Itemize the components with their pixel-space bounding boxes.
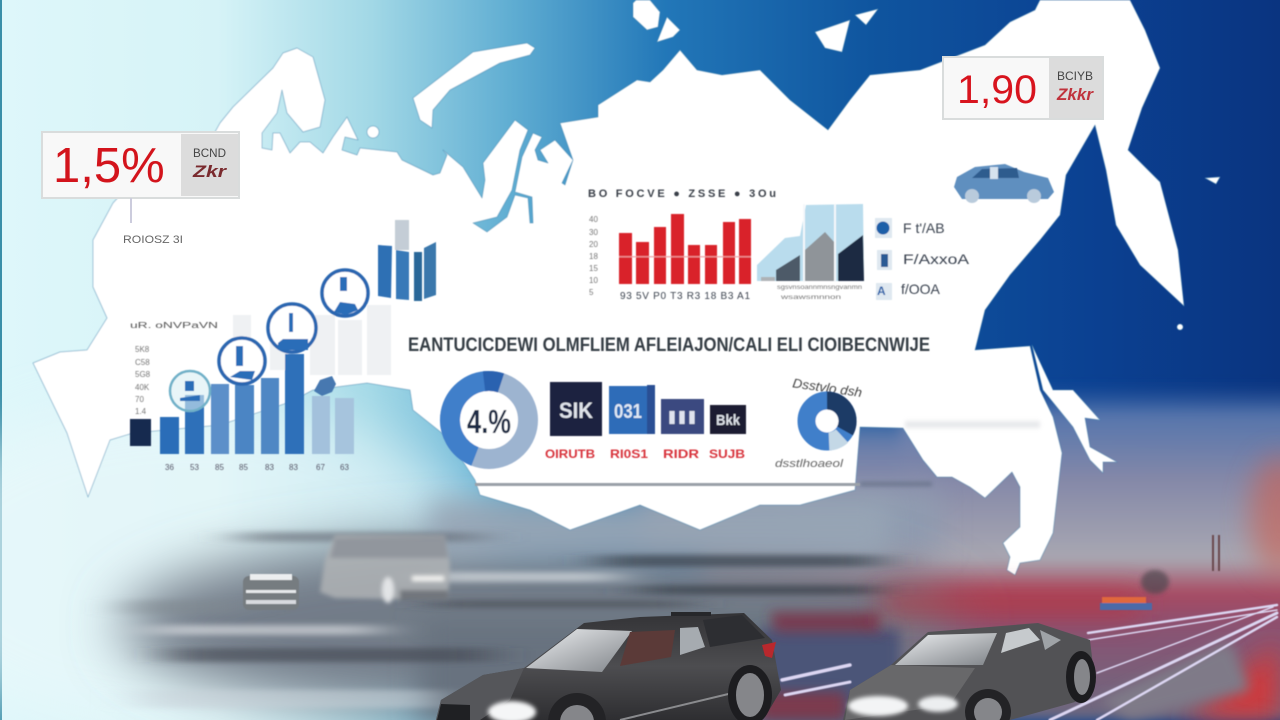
y axis labels: 18	[589, 252, 598, 261]
y axis labels	[135, 345, 151, 416]
x axis labels: 85	[215, 463, 224, 472]
icon: half circle	[314, 376, 336, 396]
car: grey sedan	[843, 623, 1096, 720]
pale background bars	[233, 305, 391, 375]
y axis labels: 5G8	[135, 370, 151, 379]
donut chart: small	[775, 375, 863, 470]
tile 2: 031	[614, 401, 642, 423]
tile 4: Bkk	[716, 412, 741, 429]
callout value: 1,90	[957, 68, 1037, 112]
tile 2	[609, 385, 655, 461]
blurred distant car: small truck	[243, 574, 299, 610]
callout: 1,5%: BCND	[193, 146, 226, 160]
x axis labels: 63	[340, 463, 349, 472]
blurred distant car: silver sedan	[320, 535, 450, 603]
x axis labels: 83	[289, 463, 298, 472]
callout: 1,5%	[42, 132, 239, 246]
legend row 3	[876, 281, 941, 300]
stat tiles row	[545, 382, 746, 461]
y axis labels: 40	[589, 215, 598, 224]
legend row 3: A	[877, 284, 886, 298]
tile 4	[709, 405, 746, 461]
y axis labels: 40K	[135, 383, 150, 392]
x axis labels	[165, 463, 349, 472]
y axis labels: 1.4	[135, 407, 147, 416]
x axis labels: 67	[316, 463, 325, 472]
tile 3: III	[667, 408, 697, 428]
chart legend: BO FOCVE ● ZSSE ● 3Ou	[588, 188, 776, 200]
y axis labels: 20	[589, 240, 598, 249]
chart title: uR. oNVPaVN	[130, 321, 218, 330]
y axis labels: 5	[589, 288, 594, 297]
tile 1: OIRUTB	[545, 447, 595, 461]
blurred streaks	[130, 532, 880, 708]
legend: three icon rows	[875, 218, 970, 300]
chart: red bar chart	[588, 188, 776, 302]
y axis labels: 5K8	[135, 345, 150, 354]
donut chart: 4%	[450, 381, 528, 459]
heading: EANTUCICDEWI OLMFLIEM AFLEIAJON/CALI ELI CIOIBECNWIJE	[408, 335, 930, 356]
lower scene haze behind the map	[120, 385, 1280, 720]
car: dark SUV	[436, 612, 781, 720]
tile 3: RIDR	[663, 447, 699, 461]
y axis labels: 15	[589, 264, 598, 273]
icon: circle 3	[268, 304, 316, 352]
callout: 1,5%: Zkr	[192, 162, 228, 181]
grey motion haze	[120, 535, 960, 715]
red light haze	[880, 592, 1280, 720]
x axis labels: 36	[165, 463, 174, 472]
y axis labels: 70	[135, 395, 144, 404]
y axis labels: 10	[589, 276, 598, 285]
chart: area panels: wsawsmnnon	[779, 295, 841, 301]
bottom motion-blur road scene	[130, 421, 1280, 720]
road surface	[760, 612, 900, 720]
legend row 2: F/AxxoA	[903, 251, 970, 267]
y axis labels	[589, 215, 598, 297]
callout: 1,90: BCIYB	[1057, 69, 1093, 83]
tile 4: SUJB	[709, 447, 745, 461]
callout: 1,5%: ROIOSZ 3I	[123, 234, 183, 246]
donut value: 4.%	[467, 403, 511, 440]
icon: blue car	[954, 164, 1054, 203]
tile 1	[545, 382, 602, 461]
donut caption: dsstlhoaeol	[775, 458, 844, 470]
legend row 1: F t'/AB	[903, 220, 945, 236]
tile 1: SIK	[559, 398, 593, 423]
x axis labels: 83	[265, 463, 274, 472]
bars	[160, 354, 354, 454]
slate and red sky on the right	[900, 385, 1280, 720]
coral glow at right	[1250, 455, 1280, 575]
chart: blue bar chart with milestone circles	[130, 270, 391, 472]
y axis labels: C58	[135, 358, 150, 367]
callout: 1,90	[943, 57, 1103, 119]
legend row 3: f/OOA	[901, 281, 941, 297]
x axis labels: 93 5V P0 T3 R3 18 B3 A1	[620, 291, 750, 302]
chart: upper right bars	[378, 220, 436, 301]
pale wash lower left	[0, 400, 490, 720]
tile 2: RI0S1	[610, 447, 648, 461]
chart: area panels	[757, 204, 864, 301]
callout: 1,90: Zkkr	[1056, 85, 1094, 104]
caption: sgsvnsoannmnsngvanmn	[777, 285, 862, 291]
tile 3	[661, 399, 704, 461]
distant car with tail lights	[1100, 535, 1220, 610]
icon: circle 2	[219, 338, 265, 384]
x axis labels: 53	[190, 463, 199, 472]
donut title: Dsstvlo dsh	[792, 375, 863, 400]
callout value: 1,5%	[53, 139, 165, 193]
road light trails	[782, 605, 1277, 720]
map: white landmass of Russia with islands	[33, 0, 1220, 575]
streaks over the map tail	[475, 421, 1040, 486]
y axis labels: 30	[589, 228, 598, 237]
icon: circle 1	[170, 371, 210, 411]
bars	[619, 214, 751, 284]
x axis labels: 85	[239, 463, 248, 472]
icon: circle 4	[322, 270, 368, 316]
